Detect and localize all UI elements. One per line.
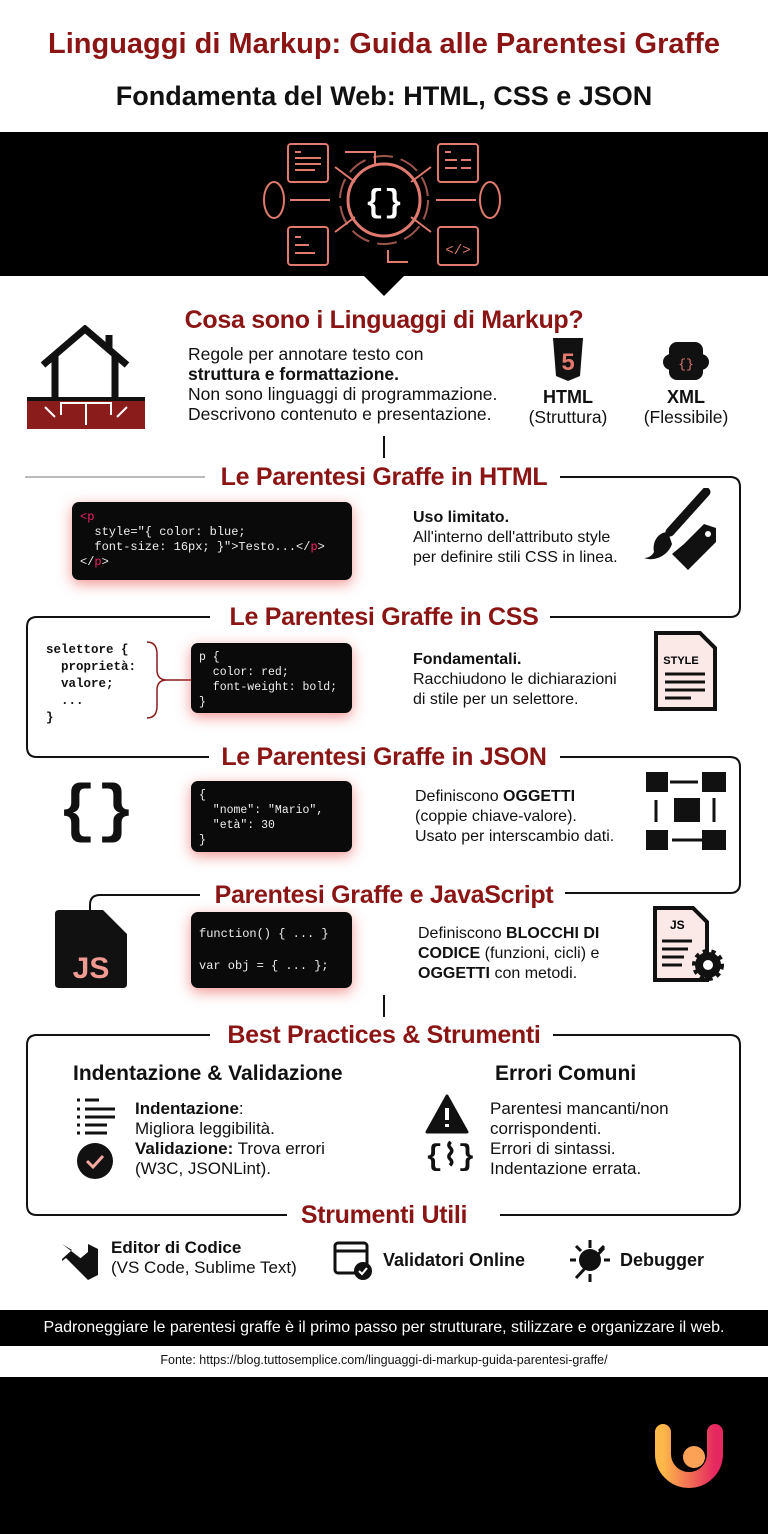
heading: CSS: Le Parentesi Graffe in CSS — [230, 603, 538, 631]
icon: braces: {} — [58, 777, 135, 849]
code: JSON: { "nome": "Mario", "età": 30 } — [199, 789, 323, 847]
text: indentazione: (W3C, JSONLint). — [135, 1159, 271, 1178]
heading: best practices: Best Practices & Strumenti — [227, 1021, 541, 1049]
icon: warning — [426, 1094, 469, 1134]
code: CSS: p { color: red; font-weight: bold; } — [199, 651, 337, 709]
icon: list indent — [77, 1098, 115, 1134]
text: HTML: Uso limitato. — [413, 509, 509, 526]
brace connector — [147, 641, 191, 719]
icon: style doc — [654, 631, 717, 711]
text: errori: Parentesi mancanti/non — [490, 1099, 669, 1118]
text: JSON: Definiscono OGGETTI — [415, 788, 575, 805]
text: CSS: Racchiudono le dichiarazioni — [413, 671, 617, 688]
text: indentazione: Migliora leggibilità. — [135, 1119, 275, 1138]
text: JS: OGGETTI con metodi. — [418, 965, 577, 982]
title: Linguaggi di Markup: Guida alle Parentesi Graffe — [48, 28, 720, 60]
text: errori: Errori di sintassi. — [490, 1139, 616, 1158]
text: JS — [418, 925, 599, 982]
tool: editor: Editor di Codice — [111, 1238, 241, 1257]
icon: JS gear — [653, 906, 724, 982]
tool: validatori — [334, 1242, 525, 1280]
heading: cosa sono: Cosa sono i Linguaggi di Markup? — [185, 306, 583, 334]
icon: brush & tag — [644, 488, 716, 570]
icon: HTML: (Struttura) — [529, 407, 607, 427]
text: definition: Non sono linguaggi di programmazione. — [188, 384, 497, 404]
code: JSON — [191, 781, 352, 852]
icon: JS file: JS — [73, 952, 109, 985]
icon: XML: XML — [667, 387, 705, 407]
footer bar — [0, 1310, 768, 1346]
text: HTML: All'interno dell'attributo style — [413, 529, 610, 546]
icon: JS file — [55, 910, 127, 988]
heading: JSON: Le Parentesi Graffe in JSON — [221, 743, 547, 771]
hero banner: </> — [445, 243, 471, 259]
text: JS: Definiscono BLOCCHI DI — [418, 925, 599, 942]
text: definition: Descrivono contenuto e presentazione. — [188, 404, 492, 424]
tool: debugger: Debugger — [620, 1250, 704, 1270]
bottom band with logo — [0, 1377, 768, 1534]
source: Fonte: https://blog.tuttosemplice.com/linguaggi-di-markup-guida-parentesi-graffe/ — [160, 1353, 608, 1367]
tool: validatori: Validatori Online — [383, 1250, 525, 1270]
text: CSS: di stile per un selettore. — [413, 691, 578, 708]
text: JSON — [415, 788, 614, 845]
text: errori — [490, 1099, 669, 1178]
text: definition — [188, 344, 497, 424]
icon: broken braces: {⌇} — [425, 1141, 476, 1175]
text: indentazione: Validazione: Trova errori — [135, 1139, 325, 1158]
text: CSS — [413, 651, 617, 708]
icon: JS gear: JS — [670, 918, 685, 932]
tool: editor: (VS Code, Sublime Text) — [111, 1258, 297, 1277]
icon: HTML — [529, 338, 607, 427]
code: HTML — [72, 502, 352, 580]
text: CSS syntax: selettore { proprietà: valore; ... } — [46, 643, 136, 725]
icon: HTML: HTML — [543, 387, 593, 407]
icon: XML: (Flessibile) — [644, 407, 728, 427]
icon: XML — [644, 342, 728, 427]
text: errori: corrispondenti. — [490, 1119, 602, 1138]
text: JSON: (coppie chiave-valore). — [415, 808, 577, 825]
code: HTML: <p style="{ color: blue; font-size: 16px; }">Testo...</p> </p> — [80, 510, 325, 569]
subheading: errori: Errori Comuni — [495, 1062, 636, 1085]
text: HTML: per definire stili CSS in linea. — [413, 549, 618, 566]
text: definition: struttura e formattazione. — [188, 364, 399, 384]
text: JSON: Usato per interscambio dati. — [415, 828, 614, 845]
text: definition: Regole per annotare testo con — [188, 344, 423, 364]
tool: debugger — [570, 1240, 704, 1282]
text: JS: CODICE (funzioni, cicli) e — [418, 945, 599, 962]
text: HTML — [413, 509, 618, 566]
text: indentazione — [135, 1099, 325, 1178]
text: CSS: Fondamentali. — [413, 651, 521, 668]
heading: HTML: Le Parentesi Graffe in HTML — [221, 463, 547, 491]
hero banner: {} — [365, 185, 403, 222]
subtitle: Fondamenta del Web: HTML, CSS e JSON — [116, 81, 652, 111]
icon: style doc: STYLE — [663, 655, 699, 667]
tool: editor — [62, 1238, 297, 1280]
code: JS: function() { ... } var obj = { ... }; — [199, 927, 329, 973]
heading: strumenti: Strumenti Utili — [301, 1201, 467, 1229]
icon: HTML: 5 — [561, 349, 575, 376]
text: errori: Indentazione errata. — [490, 1159, 641, 1178]
heading: JS: Parentesi Graffe e JavaScript — [215, 881, 553, 909]
icon: XML: {} — [678, 357, 694, 372]
icon: data exchange — [646, 772, 726, 850]
icon: check — [77, 1143, 113, 1179]
icon: house — [27, 325, 145, 429]
text: indentazione: Indentazione: — [135, 1099, 244, 1118]
subheading: indentazione: Indentazione & Validazione — [73, 1062, 343, 1085]
hero banner — [0, 132, 768, 296]
code: JS — [191, 912, 352, 988]
footer bar: Padroneggiare le parentesi graffe è il primo passo per strutturare, stilizzare e organizzare il web. — [44, 1319, 724, 1336]
logo — [655, 1424, 723, 1488]
